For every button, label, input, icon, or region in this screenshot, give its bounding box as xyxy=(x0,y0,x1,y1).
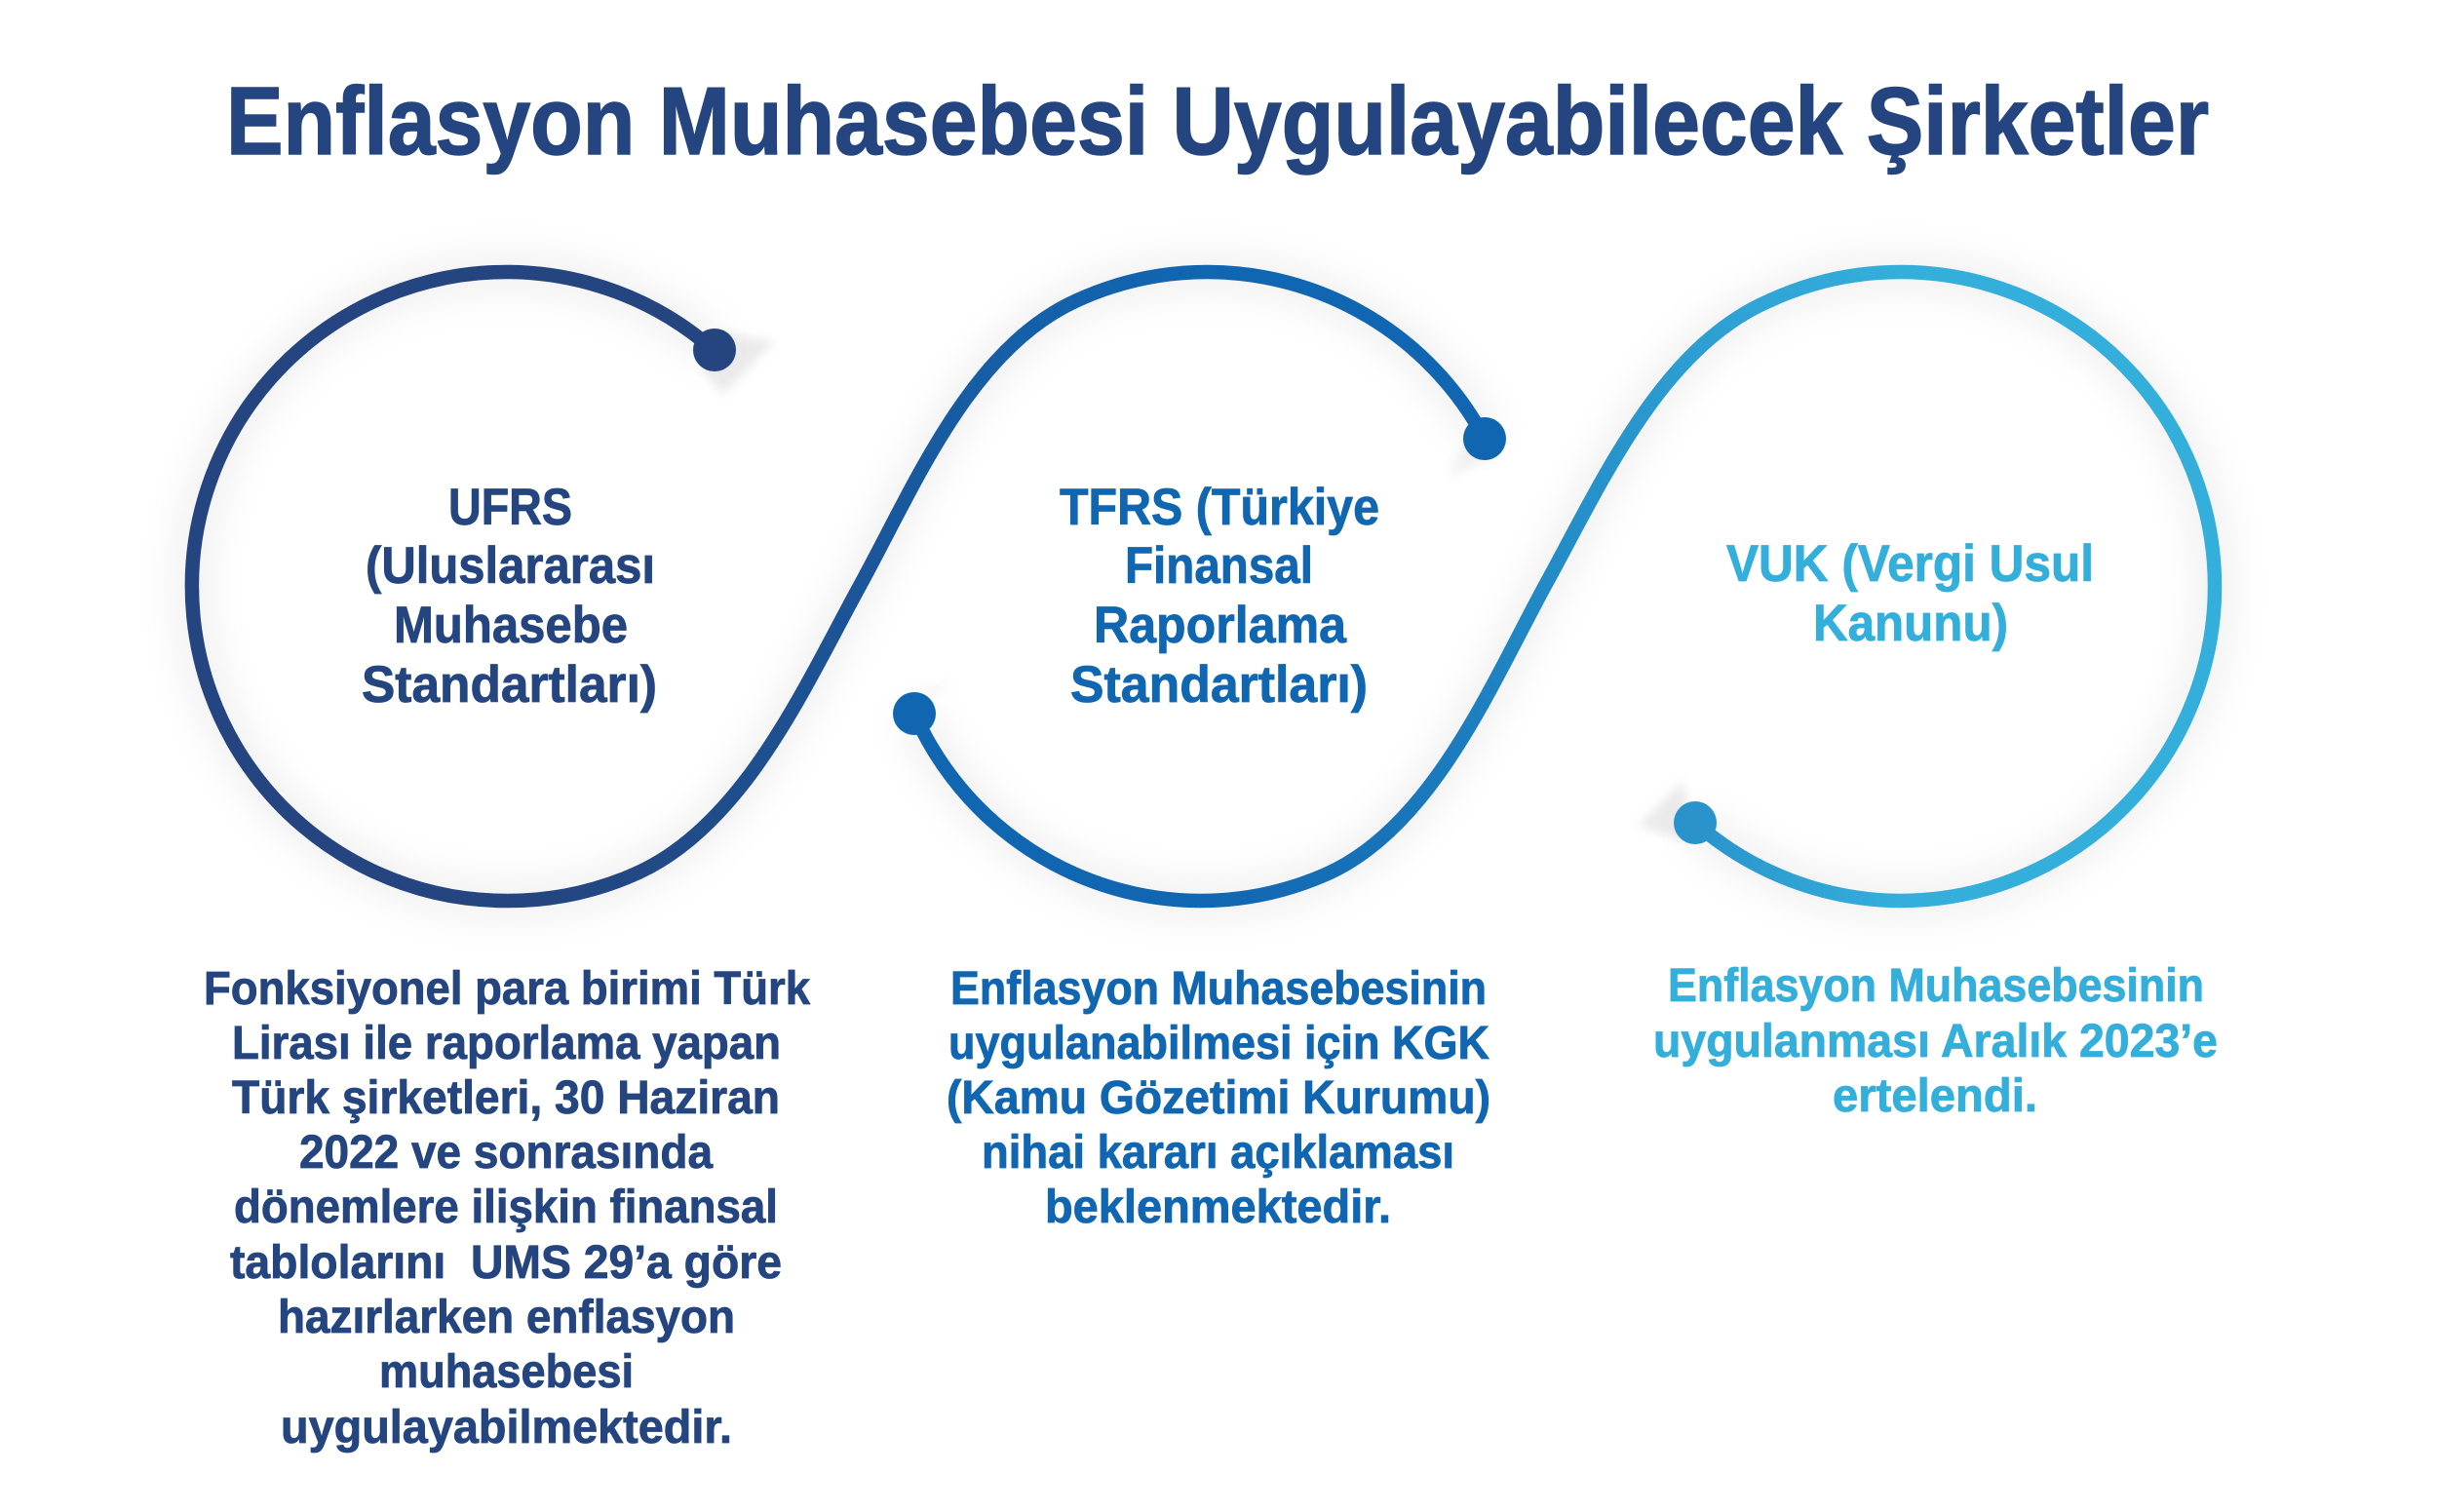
text block: UFRS description: Fonksiyonel para birimi Türk xyxy=(204,963,810,1015)
icon: dot UFRS end xyxy=(693,329,736,371)
text block: TFRS description: beklenmektedir. xyxy=(1045,1182,1391,1233)
text block: UFRS description: Lirası ile raporlama yapan xyxy=(232,1018,781,1069)
heading: VUK: Kanunu) xyxy=(1813,595,2008,652)
icon: dot VUK end xyxy=(1674,801,1717,844)
text block: UFRS description: Türk şirketleri, 30 Haziran xyxy=(232,1072,780,1124)
heading: VUK xyxy=(1726,535,2094,652)
soft shadow behind the curves xyxy=(192,272,2215,901)
text block: VUK description: uygulanması Aralık 2023’e xyxy=(1653,1016,2218,1067)
text block: UFRS description: dönemlere ilişkin finansal xyxy=(234,1182,778,1233)
text block: VUK description: Enflasyon Muhasebesinin xyxy=(1668,960,2204,1012)
title: Enflasyon Muhasebesi Uygulayabilecek Şirketler xyxy=(226,67,2209,174)
text block: UFRS description: hazırlarken enflasyon xyxy=(278,1292,735,1343)
heading: UFRS: (Uluslararası xyxy=(366,537,655,595)
text block: UFRS description xyxy=(204,963,810,1454)
icon: dot TFRS start xyxy=(893,692,936,735)
curve: UFRS loop into TFRS top xyxy=(192,272,1485,901)
heading: VUK: VUK (Vergi Usul xyxy=(1726,535,2094,593)
heading: UFRS: Muhasebe xyxy=(394,597,628,654)
text block: VUK description xyxy=(1653,960,2218,1122)
text block: TFRS description: (Kamu Gözetimi Kurumu) xyxy=(947,1072,1490,1124)
heading: UFRS xyxy=(362,479,657,714)
text block: VUK description: ertelendi. xyxy=(1833,1070,2037,1122)
text block: TFRS description: nihai kararı açıklaması xyxy=(982,1127,1454,1179)
curve: TFRS bottom into VUK loop xyxy=(914,272,2215,901)
heading: TFRS: TFRS (Türkiye xyxy=(1060,479,1379,536)
text block: UFRS description: 2022 ve sonrasında xyxy=(299,1127,713,1179)
heading: TFRS xyxy=(1060,479,1379,714)
icon: dot TFRS end xyxy=(1463,417,1506,460)
heading: TFRS: Standartları) xyxy=(1070,656,1368,714)
text block: UFRS description: uygulayabilmektedir. xyxy=(281,1402,732,1454)
text block: TFRS description xyxy=(947,963,1490,1233)
heading: TFRS: Finansal xyxy=(1125,537,1313,595)
heading: TFRS: Raporlama xyxy=(1094,597,1346,654)
text block: TFRS description: uygulanabilmesi için KGK xyxy=(948,1018,1489,1069)
text block: UFRS description: tablolarını UMS 29’a göre xyxy=(230,1237,782,1289)
text block: TFRS description: Enflasyon Muhasebesinin xyxy=(950,963,1487,1015)
heading: UFRS: Standartları) xyxy=(362,656,657,714)
text block: UFRS description: muhasebesi xyxy=(379,1346,634,1398)
heading: UFRS: UFRS xyxy=(448,479,572,536)
